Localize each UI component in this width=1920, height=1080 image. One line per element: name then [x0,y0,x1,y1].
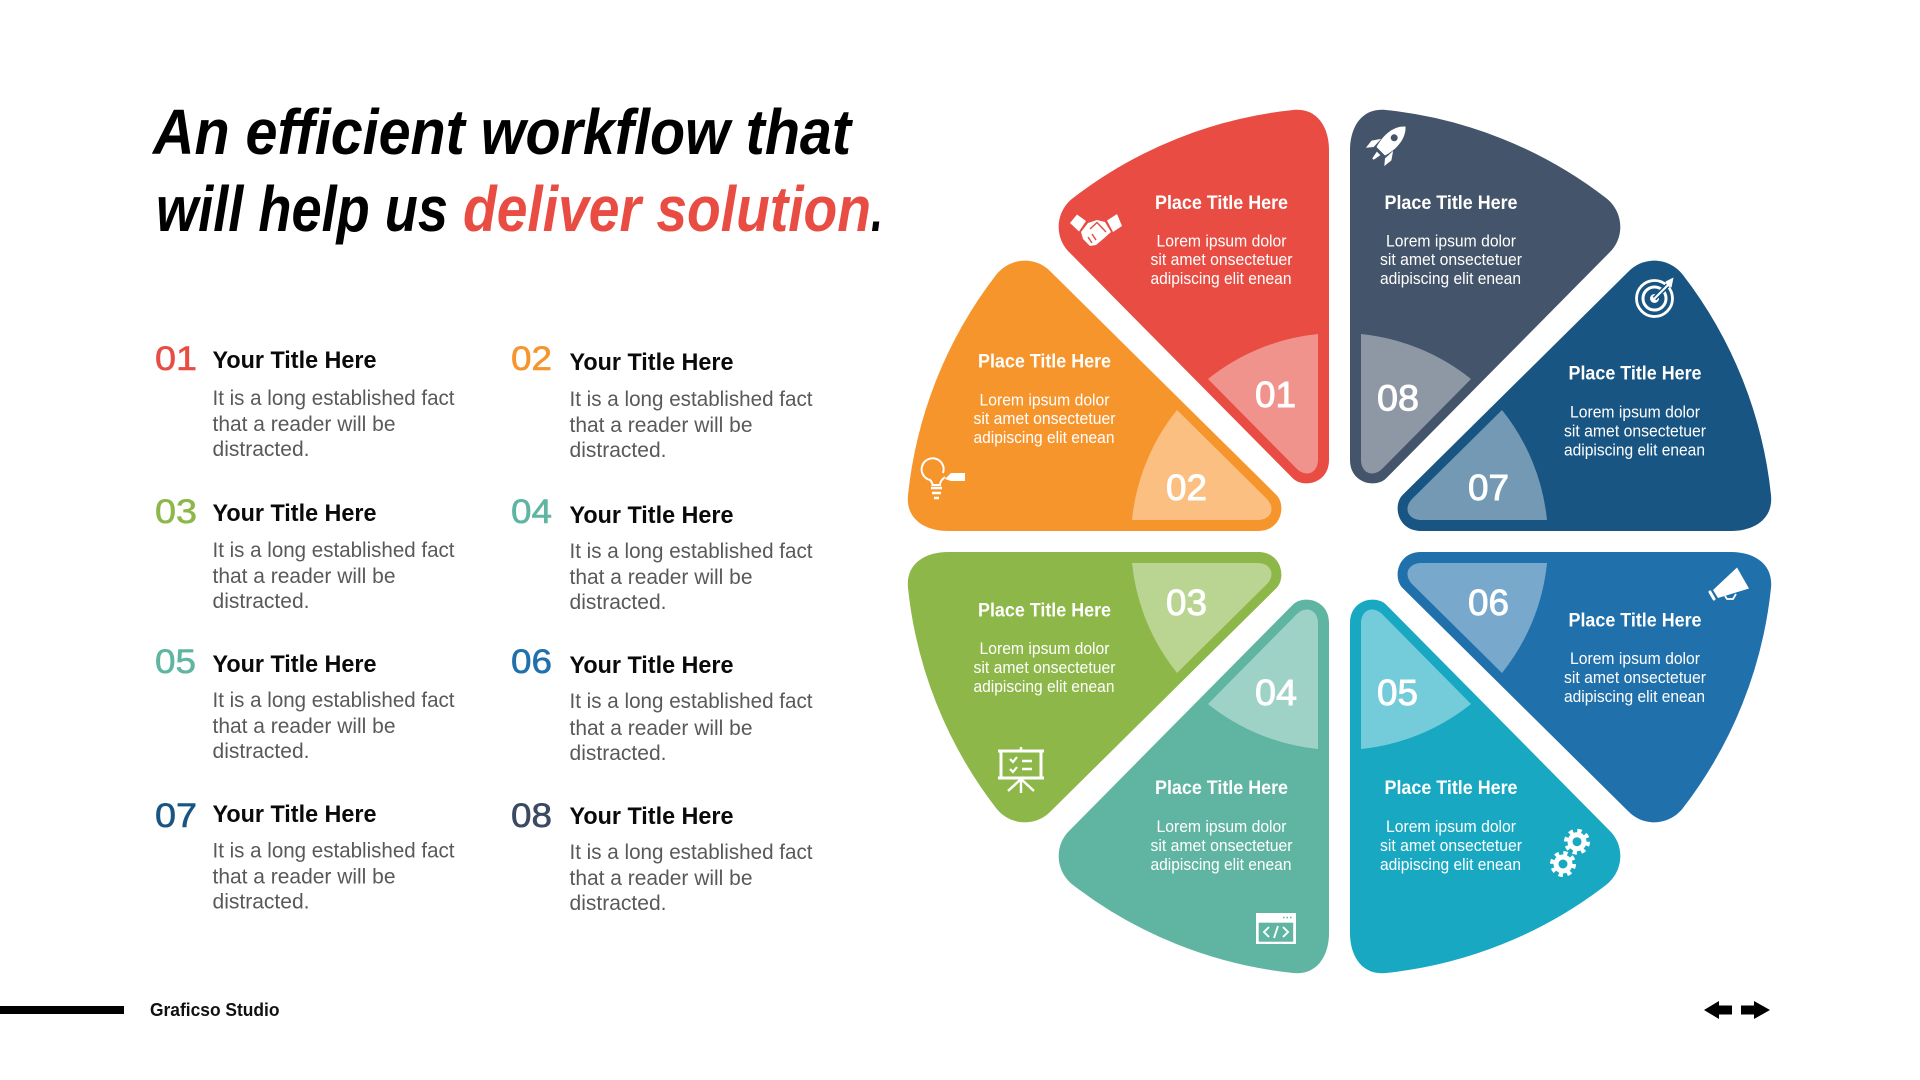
panel title 08: Place Title Here [1384,192,1518,214]
panel title 04: Place Title Here [1155,777,1288,799]
icon: rocket [1363,117,1415,169]
list item 06: It is a long established fact [570,690,813,713]
panel: step 03 green [908,552,1281,822]
list item 03: 03 [155,493,197,531]
list item 04: 04 [511,493,552,531]
title: An efficient workflow that [151,96,853,168]
panel: step 08 navy [1350,110,1620,483]
list item 08 [511,797,813,915]
list item 08: It is a long established fact [570,841,813,864]
list item 05: distracted. [212,740,310,763]
panel body 03: Lorem ipsum dolor [980,640,1110,658]
panel body 02 [974,392,1116,447]
panel: step 07 dark blue [1398,261,1771,531]
panel body 04 [1150,818,1293,874]
wedge 08 [1350,110,1620,483]
panel title 07: Place Title Here [1568,362,1702,384]
list item 01: distracted. [212,438,310,461]
list item 01: that a reader will be [212,413,396,436]
wedge 03 [908,552,1281,822]
icon: presentation board [998,747,1044,793]
list item 01: Your Title Here [212,347,376,374]
list item 08: distracted. [570,892,666,915]
panel: step 06 blue [1398,552,1771,822]
number 01: 01 [1255,374,1296,415]
list item 03: It is a long established fact [212,539,455,562]
list item 05: that a reader will be [212,715,396,738]
list item 03: Your Title Here [212,500,376,527]
list item 08: that a reader will be [570,867,752,890]
number sector 08 [1361,334,1471,473]
icon: handshake [1070,214,1122,246]
panel body 07: sit amet onsectetuer [1564,422,1706,440]
title: will help us [156,173,448,245]
number 02: 02 [1166,467,1207,508]
panel body 06: Lorem ipsum dolor [1570,650,1700,668]
panel title 02: Place Title Here [978,350,1111,372]
panel body 03: adipiscing elit enean [974,678,1114,696]
list item 08: 08 [511,797,552,835]
list item 02 [511,340,813,462]
list item 06: 06 [511,643,552,681]
panel body 02: Lorem ipsum dolor [980,392,1110,410]
panel body 06 [1564,650,1706,706]
panel body 01: Lorem ipsum dolor [1156,232,1287,250]
list item 02: It is a long established fact [570,388,813,411]
number 04: 04 [1255,672,1297,713]
list item 06: that a reader will be [570,717,752,740]
list item 02: that a reader will be [570,414,752,437]
title: deliver solution [463,173,871,245]
panel body 08: sit amet onsectetuer [1380,251,1522,269]
number 07: 07 [1468,467,1509,508]
panel body 04: Lorem ipsum dolor [1156,818,1287,836]
panel body 06: adipiscing elit enean [1564,688,1705,706]
number sector 02 [1132,410,1271,520]
number sector 01 [1208,334,1318,473]
panel body 03: sit amet onsectetuer [974,659,1116,677]
panel body 08: adipiscing elit enean [1380,270,1521,288]
panel: step 05 cyan [1350,600,1620,973]
title [151,96,883,245]
panel title 03: Place Title Here [978,600,1111,622]
panel body 02: sit amet onsectetuer [974,410,1116,428]
list item 07: 07 [155,797,197,835]
panel body 07: adipiscing elit enean [1564,442,1705,460]
number sector 05 [1361,610,1471,749]
list item 05: 05 [155,643,196,681]
list item 02: Your Title Here [570,349,734,376]
footer brand: Graficso Studio [150,1000,280,1020]
icon: gears [1552,831,1588,875]
panel: step 02 orange [908,261,1281,531]
list item 07: Your Title Here [212,801,376,828]
number 03: 03 [1166,582,1207,623]
list item 04: Your Title Here [570,502,734,529]
list item 01: 01 [155,340,197,378]
panel: step 01 red [1059,110,1329,483]
panel body 02: adipiscing elit enean [974,429,1114,447]
list item 06: Your Title Here [570,652,734,679]
number 08: 08 [1377,378,1419,418]
panel body 05: adipiscing elit enean [1380,856,1521,874]
list item 04: that a reader will be [570,566,752,589]
panel body 04: sit amet onsectetuer [1150,837,1293,855]
list item 04 [511,493,813,614]
list item 03 [155,493,455,613]
list item 05 [155,643,455,763]
panel body 01: adipiscing elit enean [1150,270,1292,288]
list item 05: Your Title Here [212,651,376,678]
icon: target with arrow [1636,278,1674,316]
list item 07: distracted. [212,890,310,914]
list item 04: distracted. [570,591,666,614]
number sector 07 [1408,410,1547,520]
panel title 05: Place Title Here [1384,777,1518,799]
panel body 04: adipiscing elit enean [1150,856,1292,874]
panel: step 04 teal [1059,600,1329,973]
panel title 06: Place Title Here [1568,610,1702,632]
wedge 07 [1398,261,1771,531]
panel body 01 [1150,232,1293,288]
number sector 06 [1408,563,1547,673]
list item 01: It is a long established fact [212,387,455,410]
list item 02: 02 [511,340,552,378]
number 06: 06 [1468,582,1509,623]
panel body 05: sit amet onsectetuer [1380,837,1522,855]
icon: code window [1256,913,1296,944]
panel body 05: Lorem ipsum dolor [1386,818,1516,836]
panel body 08: Lorem ipsum dolor [1386,232,1516,250]
wedge 04 [1059,600,1329,973]
list item 03: that a reader will be [212,565,396,588]
icon: light bulb with tag [922,458,965,498]
number sector 04 [1208,610,1318,749]
title: . [871,173,883,245]
panel body 03 [974,640,1116,696]
icon: next arrow [1741,1001,1770,1019]
icon: previous arrow [1704,1001,1732,1019]
panel body 05 [1380,818,1522,874]
number sector 03 [1132,563,1271,673]
list item 03: distracted. [212,590,310,613]
panel body 06: sit amet onsectetuer [1564,669,1706,687]
wedge 05 [1350,600,1620,973]
list item 07 [155,797,455,914]
list item 02: distracted. [570,439,666,462]
list item 04: It is a long established fact [570,540,813,563]
panel body 01: sit amet onsectetuer [1150,251,1293,269]
panel body 08 [1380,232,1522,288]
panel body 07: Lorem ipsum dolor [1570,404,1700,422]
panel body 07 [1564,404,1706,460]
list item 05: It is a long established fact [212,689,455,712]
list item 07: that a reader will be [212,866,396,888]
list item 07: It is a long established fact [212,840,455,862]
wedge 01 [1059,110,1329,483]
wedge 02 [908,261,1281,531]
panel title 01: Place Title Here [1155,192,1288,214]
wedge 06 [1398,552,1771,822]
list item 01 [155,340,455,461]
list item 08: Your Title Here [570,803,734,830]
icon: megaphone [1710,568,1749,599]
list item 06: distracted. [570,742,666,765]
number 05: 05 [1377,672,1418,713]
list item 06 [511,643,813,765]
footer bar [0,1006,124,1014]
